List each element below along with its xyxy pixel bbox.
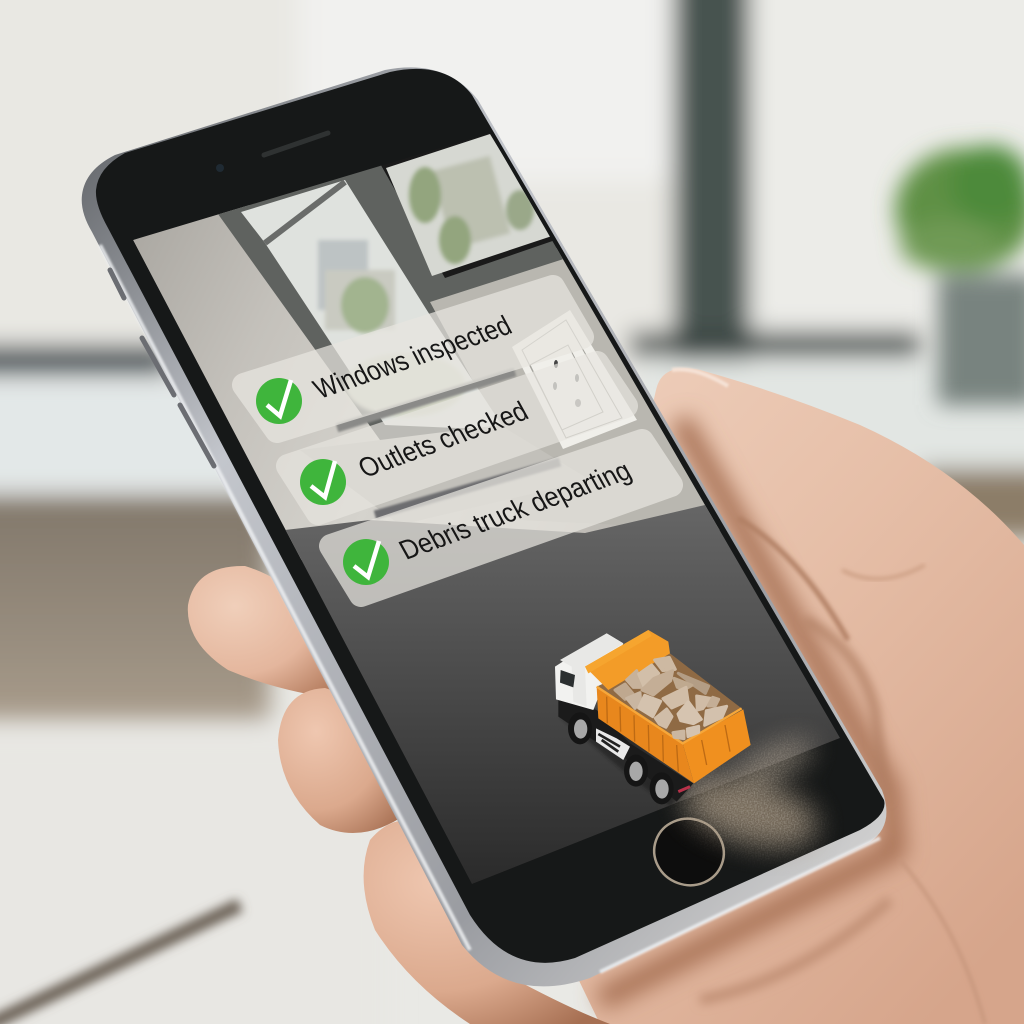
- screen content: [133, 134, 840, 884]
- bed: [585, 630, 751, 783]
- icon: check: [343, 539, 389, 585]
- pen on desk: [0, 905, 240, 1024]
- silver highlight: [100, 245, 880, 972]
- floor: [285, 505, 860, 900]
- side buttons: [110, 270, 214, 466]
- phone silver body: [82, 67, 886, 986]
- lower black band: [472, 738, 880, 930]
- chassis: [558, 700, 693, 802]
- finger: ring: [364, 820, 610, 1024]
- finger: middle: [278, 688, 405, 833]
- wall: [133, 200, 720, 560]
- speaker and camera: [216, 133, 328, 172]
- finger: index: [188, 566, 345, 700]
- plant: [895, 145, 1024, 405]
- phone: [82, 67, 886, 986]
- label: outlets checked: Outlets checked: [353, 396, 533, 484]
- checklist item: debris truck departing: [331, 441, 671, 595]
- shadow along the phone edge: [600, 420, 895, 1000]
- truck shadow: [560, 710, 690, 807]
- window: [218, 134, 576, 440]
- dust cloud: [677, 734, 823, 859]
- label: debris truck departing: Debris truck departing: [394, 455, 636, 566]
- floor steps: [375, 426, 553, 509]
- checklist item: outlets checked: [288, 363, 626, 513]
- side step box: [596, 728, 630, 760]
- icon: check: [256, 378, 302, 424]
- dump truck: [555, 630, 751, 807]
- outlet: [512, 310, 637, 449]
- rocks: [615, 657, 727, 739]
- wheels: [568, 712, 690, 804]
- phone black front: [96, 69, 884, 963]
- label: windows inspected: Windows inspected: [308, 310, 517, 405]
- icon: check: [300, 459, 346, 505]
- home button: [645, 809, 733, 895]
- hand: palm and back fingers: [188, 368, 1024, 1024]
- cab: [555, 633, 623, 710]
- checklist item: windows inspected: [244, 287, 582, 431]
